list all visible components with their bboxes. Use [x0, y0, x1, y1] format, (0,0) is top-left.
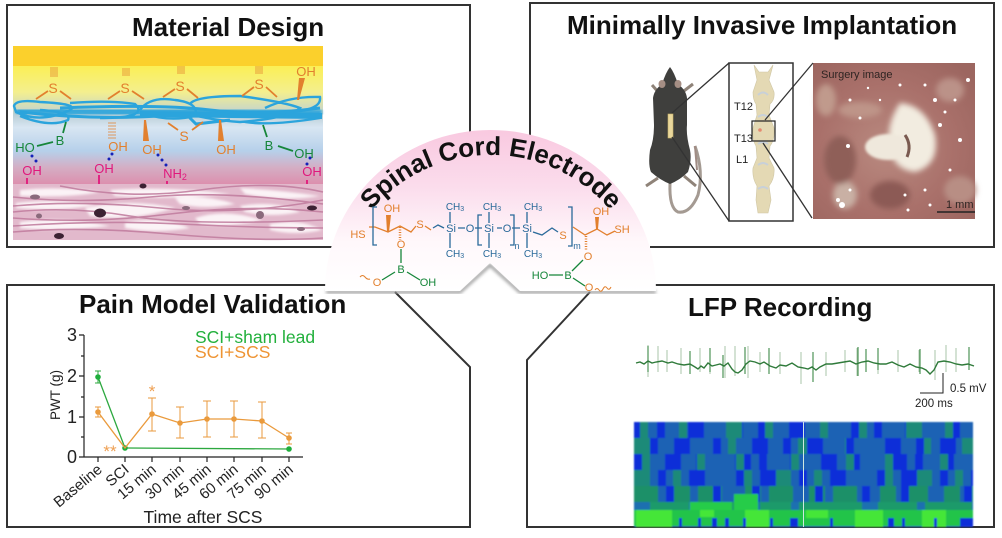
- blue siloxane segments: Si: [522, 223, 532, 235]
- y axis numbers: 2: [67, 366, 77, 386]
- heading: material design: Material Design: [132, 12, 324, 42]
- blue siloxane segments: CH: [446, 249, 460, 260]
- chart legend: SCI+sham lead: [195, 327, 315, 347]
- blue siloxane segments: 3: [460, 206, 464, 213]
- orange disulfide and hydroxyl groups: [36, 64, 316, 157]
- spine vertebrae diagram: [729, 63, 793, 221]
- orange disulfide and hydroxyl groups: S: [254, 76, 264, 92]
- blue siloxane segments: O: [466, 223, 475, 235]
- scale bar: 0.5 mV: [950, 383, 987, 395]
- x axis tick labels: [51, 461, 297, 511]
- x axis tick labels: 90 min: [251, 461, 297, 503]
- y axis title: PWT (g): [48, 370, 63, 420]
- spine vertebrae diagram: T13: [734, 133, 753, 145]
- heading: minimally invasive implantation: Minimally Invasive Implantation: [567, 10, 957, 40]
- panel: minimally invasive implantation: [530, 3, 994, 247]
- LFP voltage trace: [636, 345, 974, 384]
- mouse to spine connector lines: [672, 63, 729, 221]
- significance asterisks: **: [103, 442, 117, 461]
- x axis tick labels: 15 min: [114, 461, 160, 503]
- tissue histology image: [13, 184, 323, 240]
- orange backbone segments: O: [584, 251, 593, 263]
- orange backbone segments: S: [559, 230, 567, 242]
- scale bar: [915, 373, 987, 410]
- y axis numbers: [67, 325, 77, 467]
- heading: pain model validation: Pain Model Validation: [79, 289, 346, 319]
- y axis numbers: 1: [67, 407, 77, 427]
- blue siloxane segments: CH: [483, 202, 497, 213]
- blue siloxane segments: 3: [460, 253, 464, 260]
- orange backbone segments: OH: [384, 203, 400, 215]
- green boronate groups: B: [265, 138, 273, 153]
- orange disulfide and hydroxyl groups: OH: [296, 64, 316, 79]
- blue siloxane segments: Si: [484, 223, 494, 235]
- orange backbone segments: O: [397, 239, 406, 251]
- blue siloxane segments: 3: [538, 206, 542, 213]
- blue siloxane segments: 3: [538, 253, 542, 260]
- x axis tick labels: 60 min: [196, 461, 242, 503]
- green boronate groups: B: [56, 133, 64, 148]
- spine vertebrae diagram: T12: [734, 101, 753, 113]
- x axis title: Time after SCS: [144, 507, 262, 527]
- pink tissue functional groups: NH: [163, 166, 182, 181]
- chemical structure: [350, 202, 630, 294]
- panel: spinal cord electrode dome: [324, 130, 658, 294]
- orange backbone segments: HS: [350, 229, 366, 241]
- chart legend: [195, 327, 315, 362]
- blue siloxane segments: CH: [446, 202, 460, 213]
- pink tissue functional groups: OH: [302, 164, 322, 179]
- y axis numbers: 3: [67, 325, 77, 345]
- blue siloxane segments: [373, 202, 581, 260]
- blue siloxane segments: m: [573, 241, 581, 251]
- blue siloxane segments: CH: [483, 249, 497, 260]
- orange disulfide and hydroxyl groups: OH: [108, 139, 128, 154]
- x axis tick labels: Baseline: [51, 461, 106, 511]
- green boronate groups: HO: [15, 140, 35, 155]
- orange backbone segments: S: [416, 219, 424, 231]
- orange disulfide and hydroxyl groups: S: [120, 80, 130, 96]
- orange series: SCI+SCS: [95, 398, 292, 448]
- blue siloxane segments: CH: [524, 249, 538, 260]
- significance asterisks: [103, 382, 156, 461]
- pink tissue functional groups: 2: [182, 172, 187, 182]
- blue polymer network scribble: [14, 96, 322, 124]
- spine to photo connector lines: [763, 63, 813, 218]
- orange backbone segments: OH: [593, 206, 609, 218]
- green boronate segments: HO: [532, 270, 549, 282]
- blue hydrogen bond dots: [30, 152, 312, 166]
- chart legend: SCI+SCS: [195, 342, 270, 362]
- green boronate groups: [15, 122, 314, 161]
- x axis tick labels: 45 min: [169, 461, 215, 503]
- panel: LFP recording: [527, 285, 994, 527]
- blue siloxane segments: n: [514, 241, 520, 251]
- green boronate segments: B: [564, 270, 572, 282]
- surgery photo: [813, 63, 976, 219]
- significance asterisks: *: [149, 382, 156, 401]
- layered interface background: [13, 46, 323, 184]
- orange disulfide and hydroxyl groups: S: [175, 78, 185, 94]
- x axis tick labels: SCI: [102, 461, 133, 490]
- orange disulfide and hydroxyl groups: S: [48, 80, 58, 96]
- y axis numbers: 0: [67, 447, 77, 467]
- pink tissue functional groups: OH: [94, 161, 114, 176]
- blue siloxane segments: 3: [497, 253, 501, 260]
- pink tissue functional groups: OH: [22, 163, 42, 178]
- scale bar: 200 ms: [915, 398, 953, 410]
- curved heading: spinal cord electrode: Spinal Cord Electrode: [361, 136, 618, 208]
- spine vertebrae diagram: L1: [736, 154, 748, 166]
- blue siloxane segments: CH: [524, 202, 538, 213]
- orange backbone segments: O: [373, 277, 382, 289]
- surgery photo: Surgery image: [821, 69, 893, 81]
- blue siloxane segments: O: [503, 223, 512, 235]
- green boronate segments: B: [397, 264, 405, 276]
- green boronate segments: [382, 249, 585, 289]
- green series: SCI+sham lead: [95, 371, 292, 452]
- pink tissue functional groups: [22, 161, 322, 184]
- icon: mouse illustration: [646, 67, 700, 212]
- heading: LFP recording: LFP Recording: [688, 292, 872, 322]
- orange disulfide and hydroxyl groups: OH: [142, 142, 162, 157]
- orange disulfide and hydroxyl groups: S: [179, 128, 189, 144]
- orange backbone segments: [350, 203, 630, 294]
- x axis tick labels: 30 min: [142, 461, 188, 503]
- surgery photo: 1 mm: [946, 199, 974, 211]
- blue siloxane segments: 3: [497, 206, 501, 213]
- chart axes: [79, 335, 303, 462]
- orange backbone segments: O: [585, 282, 594, 294]
- panel: pain model validation: [7, 285, 470, 527]
- green boronate segments: OH: [420, 277, 436, 289]
- x axis tick labels: 75 min: [224, 461, 270, 503]
- orange disulfide and hydroxyl groups: OH: [216, 142, 236, 157]
- blue siloxane segments: Si: [446, 223, 456, 235]
- orange backbone segments: SH: [614, 224, 630, 236]
- green boronate groups: OH: [294, 146, 314, 161]
- panel: material design: [7, 5, 470, 247]
- spectrogram heatmap: [634, 422, 973, 527]
- line chart: PWT over time: [48, 325, 315, 527]
